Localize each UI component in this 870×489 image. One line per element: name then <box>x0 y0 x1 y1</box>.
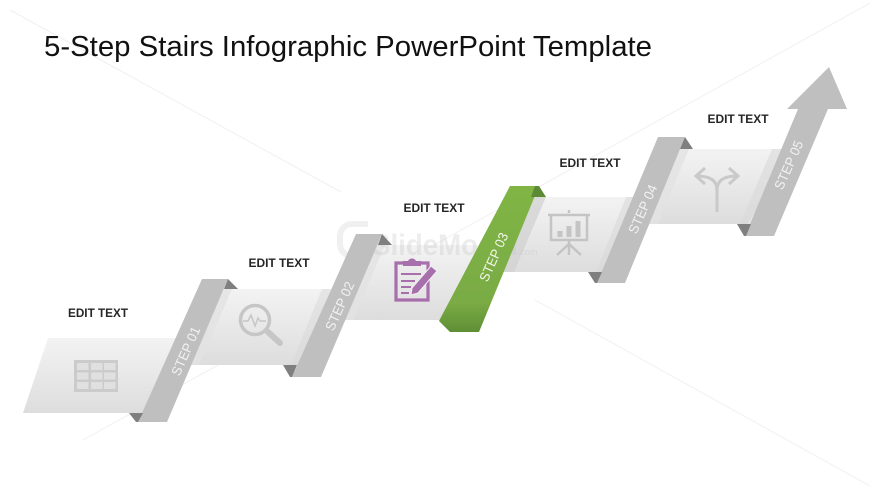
icon: clipboard with pencil <box>396 259 437 300</box>
icon: presentation board <box>548 210 590 255</box>
panel: step 2 <box>191 256 331 365</box>
icon: split arrows <box>696 168 738 212</box>
panel: step 4 <box>503 156 640 272</box>
label: EDIT TEXT <box>248 256 310 270</box>
panel: step 3 <box>345 201 500 320</box>
step 3 ribbon: STEP 03 <box>476 230 511 284</box>
icon: magnifier <box>240 306 280 343</box>
label: EDIT TEXT <box>708 112 769 126</box>
step 3 ribbon <box>439 186 546 332</box>
panel: step 5 <box>649 112 790 224</box>
label: EDIT TEXT <box>404 201 465 215</box>
watermark <box>340 224 538 262</box>
step 4 ribbon <box>588 137 693 283</box>
step 5 arrow <box>737 67 847 236</box>
step 2 ribbon: STEP 02 <box>322 279 357 333</box>
step 1 ribbon <box>129 279 238 422</box>
label: EDIT TEXT <box>560 156 621 170</box>
step 4 ribbon: STEP 04 <box>625 182 661 236</box>
step 5 arrow: STEP 05 <box>771 138 806 192</box>
label: EDIT TEXT <box>68 306 129 320</box>
panel: step 1 <box>23 306 178 413</box>
watermark: .com <box>518 247 538 257</box>
watermark: SlideModel <box>372 229 518 262</box>
icon: table <box>74 360 118 392</box>
title: 5-Step Stairs Infographic PowerPoint Template <box>44 31 652 63</box>
step 1 ribbon: STEP 01 <box>168 324 203 378</box>
step 2 ribbon <box>283 234 392 377</box>
